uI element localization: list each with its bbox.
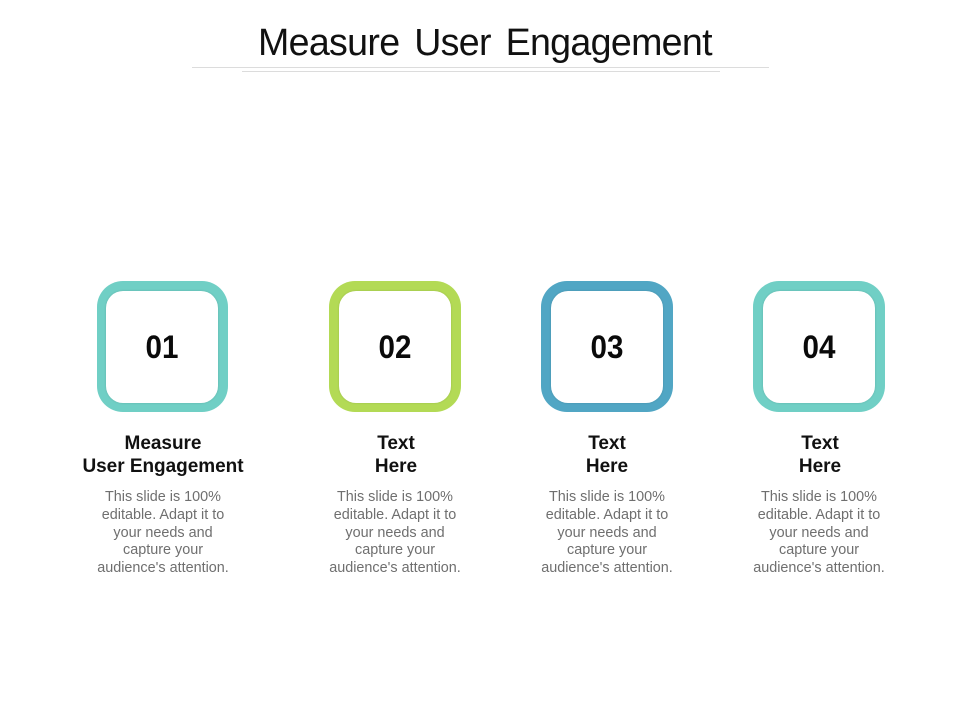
text block 02 [329, 489, 461, 576]
text block 03: capture your [567, 542, 647, 558]
text block 04: capture your [779, 542, 859, 558]
text block 04: audience's attention. [753, 560, 885, 576]
text block 01: your needs and [113, 525, 213, 541]
text block 03: audience's attention. [541, 560, 673, 576]
panel: step 01 [82, 281, 244, 576]
number card 02 [329, 281, 461, 412]
panel: step 03 [541, 281, 673, 576]
number card 01 [97, 281, 228, 412]
heading 03 [586, 433, 628, 477]
text block 02: audience's attention. [329, 560, 461, 576]
heading 04 [799, 433, 841, 477]
text block 04 [753, 489, 885, 576]
text block 02: your needs and [345, 525, 445, 541]
heading 01: User Engagement [82, 456, 244, 477]
text block 02: editable. Adapt it to [334, 507, 456, 523]
number card 04: 04 [803, 329, 835, 365]
heading 02: Text [377, 433, 415, 454]
text block 03: editable. Adapt it to [546, 507, 668, 523]
number card 04 [753, 281, 885, 412]
number card 02: 02 [379, 329, 411, 365]
number card 03 [541, 281, 673, 412]
number card 01: 01 [146, 329, 178, 365]
title: Measure User Engagement [258, 21, 712, 63]
heading 03: Here [586, 456, 628, 477]
text block 01: capture your [123, 542, 203, 558]
title underline rules [192, 67, 769, 72]
text block 04: This slide is 100% [761, 489, 877, 505]
heading 02 [375, 433, 417, 477]
text block 02: This slide is 100% [337, 489, 453, 505]
text block 02: capture your [355, 542, 435, 558]
heading 02: Here [375, 456, 417, 477]
panel: step 04 [753, 281, 885, 576]
text block 03 [541, 489, 673, 576]
text block 04: your needs and [769, 525, 869, 541]
text block 01: This slide is 100% [105, 489, 221, 505]
text block 01 [97, 489, 229, 576]
number card 03: 03 [591, 329, 623, 365]
text block 03: This slide is 100% [549, 489, 665, 505]
heading 04: Here [799, 456, 841, 477]
heading 01 [82, 433, 244, 477]
text block 01: editable. Adapt it to [102, 507, 224, 523]
heading 04: Text [801, 433, 839, 454]
heading 03: Text [588, 433, 626, 454]
text block 04: editable. Adapt it to [758, 507, 880, 523]
panel: step 02 [329, 281, 461, 576]
text block 03: your needs and [557, 525, 657, 541]
heading 01: Measure [125, 433, 201, 454]
text block 01: audience's attention. [97, 560, 229, 576]
